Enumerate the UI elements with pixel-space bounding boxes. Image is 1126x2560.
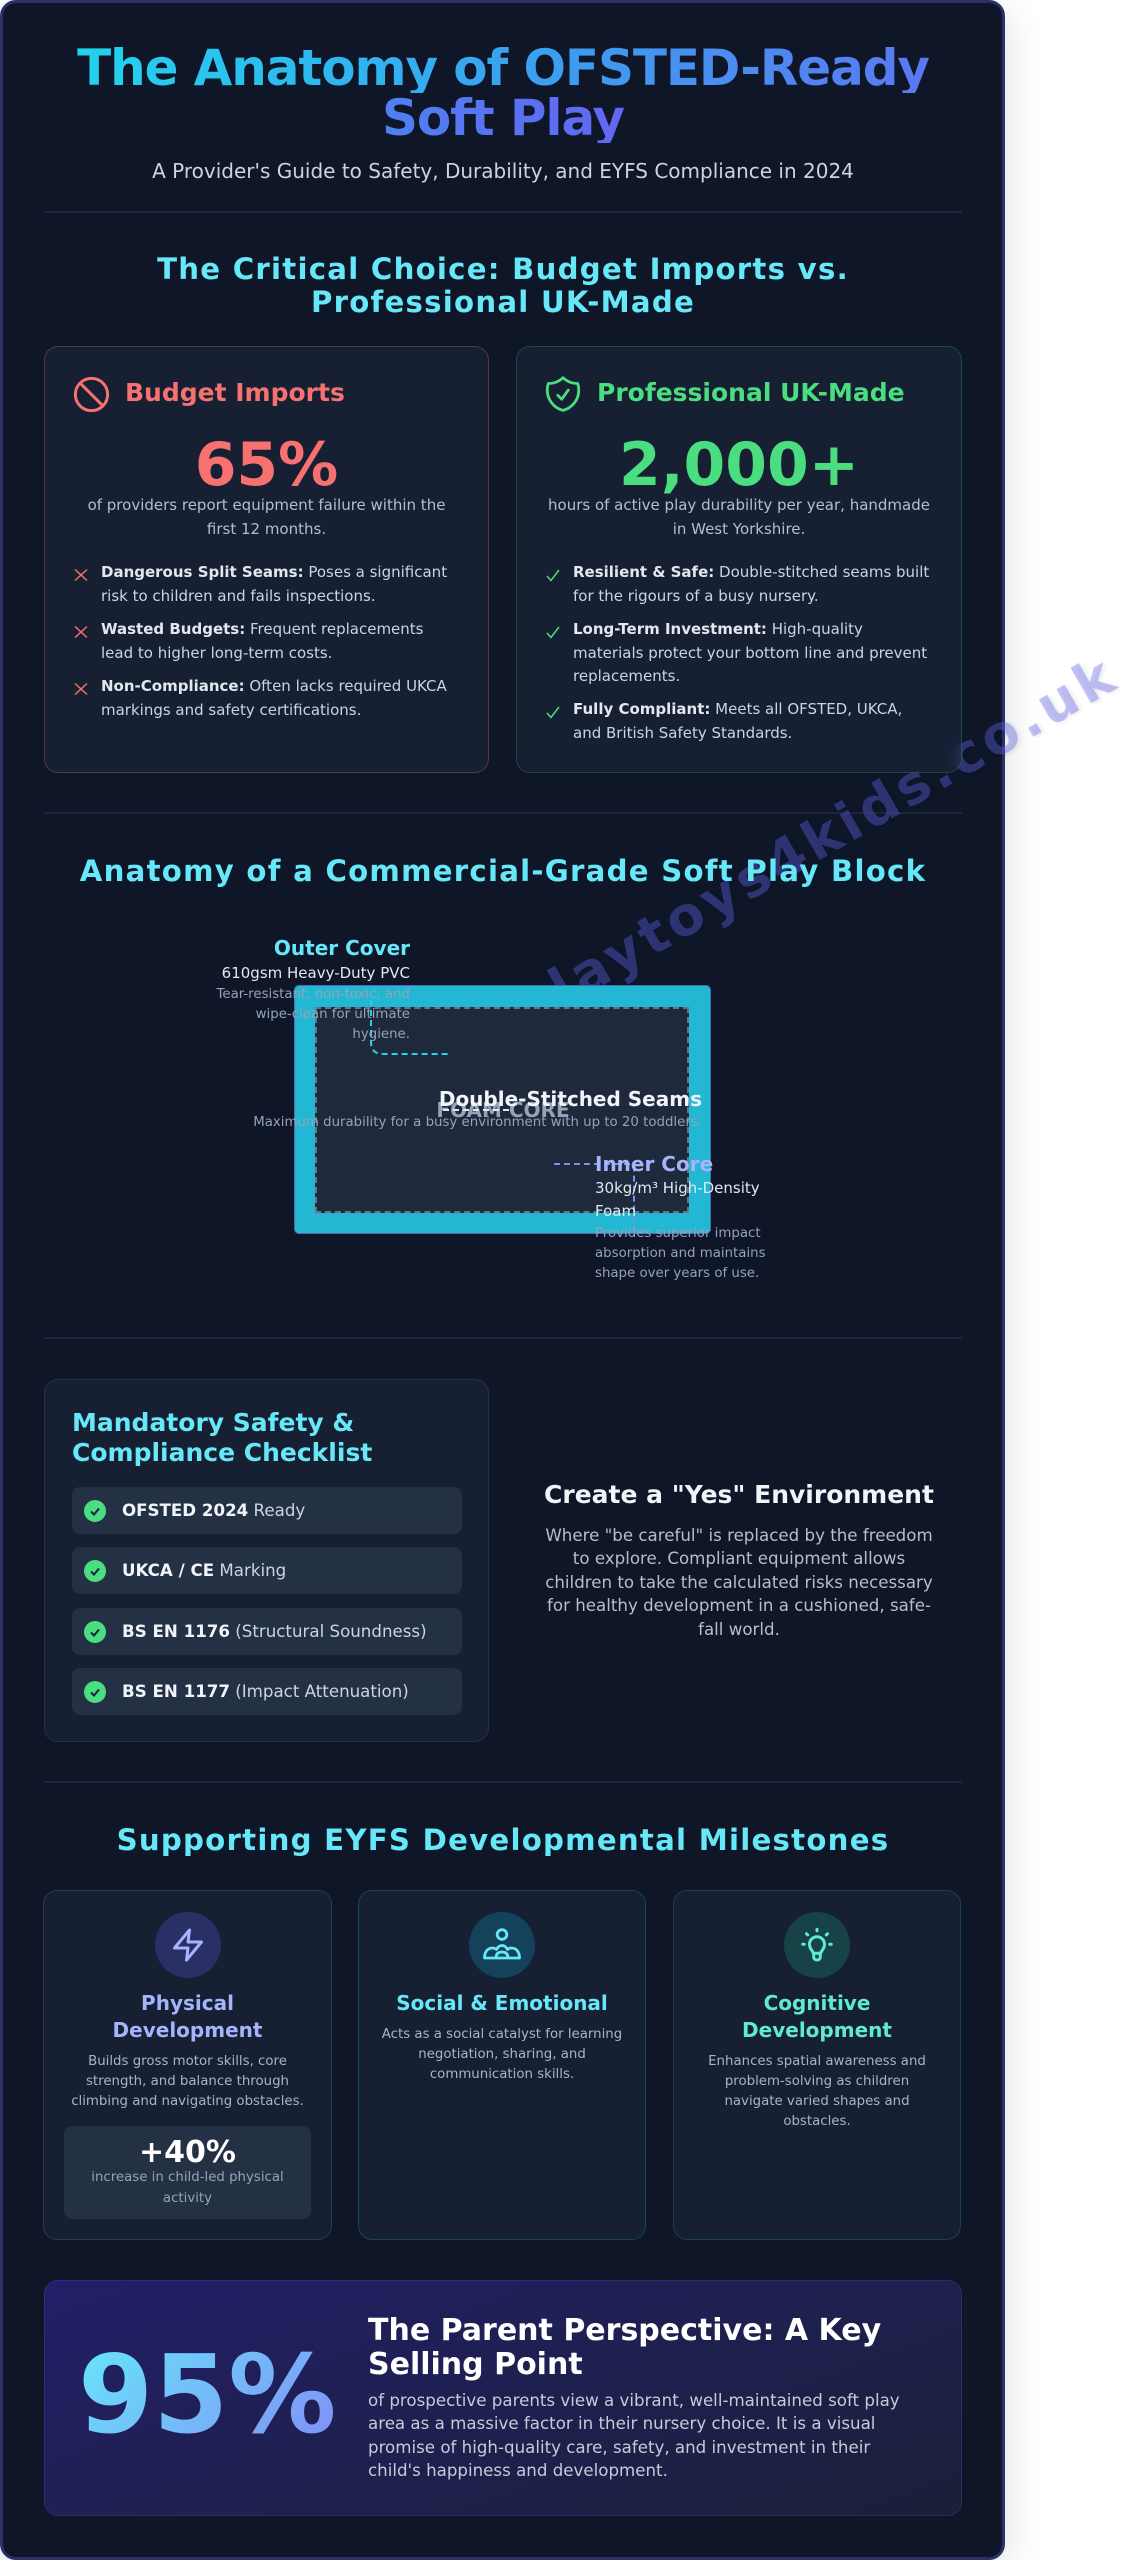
checklist row (72, 1547, 462, 1594)
callout: outer cover: hygiene. (352, 1027, 410, 1042)
panel heading: Selling Point (368, 2347, 583, 2382)
stat caption (548, 496, 930, 538)
card heading: Cognitive (764, 1991, 870, 2015)
list item: Dangerous Split Seams: Poses a significant (101, 563, 447, 581)
checklist row (72, 1487, 462, 1534)
callout: inner core: shape over years of use. (595, 1266, 759, 1281)
callout: inner core: absorption and maintains (595, 1246, 766, 1261)
heading: critical choice (157, 252, 849, 319)
card: cognitive development (673, 1890, 961, 2240)
callout: double-stitched seams (253, 1087, 702, 1130)
card: physical development (43, 1890, 332, 2240)
callout: outer cover: 610gsm Heavy-Duty PVC (222, 964, 410, 982)
inner foam core (315, 1007, 689, 1213)
heading: critical choice: The Critical Choice: Budget Imports vs. (157, 252, 849, 286)
callout: inner core: Foam (595, 1202, 636, 1220)
card heading: Physical (141, 1991, 234, 2015)
heading: critical choice: Professional UK-Made (311, 285, 695, 319)
title: Soft Play (382, 89, 624, 147)
callout: outer cover: Tear-resistant, non-toxic, and (216, 987, 410, 1002)
list item: Fully Compliant: Meets all OFSTED, UKCA, (573, 700, 902, 718)
diagram: soft play block (216, 936, 766, 1281)
list item: Wasted Budgets: Frequent replacements (101, 620, 423, 638)
icon: zap (155, 1912, 221, 1978)
panel text: child's happiness and development. (368, 2461, 668, 2480)
text block: yes environment (544, 1480, 934, 1639)
stat caption: in West Yorkshire. (673, 520, 805, 538)
checklist row: OFSTED 2024 Ready (122, 1501, 305, 1520)
panel: parent perspective (44, 2280, 962, 2516)
list item: lead to higher long-term costs. (101, 644, 332, 662)
stat caption: hours of active play durability per year, handmade (548, 496, 930, 514)
big stat: 65% (195, 430, 338, 500)
card heading (742, 1991, 892, 2042)
stat box: activity (163, 2190, 212, 2206)
big stat: 95% (78, 2333, 337, 2458)
list item: markings and safety certifications. (101, 700, 361, 718)
card text (71, 2054, 304, 2109)
list item (573, 700, 902, 742)
card text (382, 2027, 622, 2082)
callout: double-stitched seams: Maximum durability for a busy environment with up to 20 toddlers. (253, 1115, 702, 1130)
checklist row: BS EN 1176 (Structural Soundness) (122, 1622, 427, 1641)
watermark: playtoys4kids.co.uk (501, 642, 1126, 1041)
panel: compliance checklist (44, 1379, 489, 1742)
callout: inner core: 30kg/m³ High-Density (595, 1179, 760, 1197)
list item: for the rigours of a busy nursery. (573, 586, 819, 604)
panel text: area as a massive factor in their nursery choice. It is a visual (368, 2414, 875, 2433)
foam core label: FOAM CORE (436, 1098, 570, 1122)
list item: Resilient & Safe: Double-stitched seams built (573, 563, 929, 581)
panel heading (368, 2313, 881, 2382)
card heading: Professional UK-Made (597, 378, 905, 407)
subtitle: A Provider's Guide to Safety, Durability, and EYFS Compliance in 2024 (152, 159, 854, 183)
card heading: Social & Emotional (396, 1991, 608, 2015)
heading: milestones: Supporting EYFS Developmental Milestones (117, 1823, 889, 1857)
list item (101, 620, 423, 662)
panel text: of prospective parents view a vibrant, well-maintained soft play (368, 2391, 900, 2410)
card heading (113, 1991, 262, 2042)
card text: navigate varied shapes and (724, 2094, 910, 2109)
panel text (368, 2391, 900, 2480)
stat box: increase in child-led physical (91, 2170, 284, 2185)
panel heading: The Parent Perspective: A Key (368, 2313, 881, 2348)
card heading: Development (742, 2018, 892, 2042)
callout: inner core: Provides superior impact (595, 1226, 761, 1241)
connectors (370, 1000, 635, 1232)
heading: anatomy: Anatomy of a Commercial-Grade Soft Play Block (80, 854, 926, 888)
title (77, 39, 929, 147)
list item: replacements. (573, 667, 680, 685)
card text: communication skills. (430, 2067, 574, 2082)
card: social and emotional (358, 1890, 646, 2240)
checklist heading: Compliance Checklist (72, 1438, 372, 1466)
card text: negotiation, sharing, and (418, 2047, 586, 2062)
list item: risk to children and fails inspections. (101, 586, 376, 604)
card text: Acts as a social catalyst for learning (382, 2027, 622, 2042)
checklist row: BS EN 1177 (Impact Attenuation) (122, 1682, 409, 1701)
card text: Enhances spatial awareness and (708, 2054, 926, 2069)
panel: professional UK-made (516, 346, 962, 773)
callout: inner core: Inner Core (595, 1152, 713, 1176)
list item: and British Safety Standards. (573, 724, 792, 742)
card text: problem-solving as children (725, 2074, 909, 2089)
checklist row: UKCA / CE Marking (122, 1561, 286, 1580)
icon: checks (546, 570, 560, 719)
card text: strength, and balance through (86, 2074, 289, 2089)
list item (101, 677, 447, 718)
stat caption: of providers report equipment failure within the (88, 496, 445, 514)
icon: people (469, 1912, 535, 1978)
icon: prohibited (74, 376, 110, 412)
panel text: promise of high-quality care, safety, and investment in their (368, 2438, 870, 2457)
list item: Long-Term Investment: High-quality (573, 620, 863, 638)
text block: yes environment: for healthy development in a cushioned, safe- (547, 1596, 931, 1615)
list item (573, 620, 927, 685)
callout: inner core (595, 1152, 766, 1281)
callout: double-stitched seams: Double-Stitched Seams (439, 1087, 702, 1111)
text block: yes environment: fall world. (698, 1620, 780, 1639)
text block: yes environment: Where "be careful" is replaced by the freedom (545, 1526, 933, 1545)
callout: outer cover: Outer Cover (274, 936, 410, 960)
icon: lightbulb (784, 1912, 850, 1978)
card heading: Development (113, 2018, 262, 2042)
card text (708, 2054, 926, 2129)
checklist heading: Mandatory Safety & (72, 1408, 354, 1437)
outer cover layer (294, 985, 711, 1234)
stat box (64, 2126, 311, 2219)
list item (573, 563, 929, 604)
text block: yes environment: Create a "Yes" Environment (544, 1480, 934, 1509)
list item: Non-Compliance: Often lacks required UKCA (101, 677, 447, 695)
icon: shield (546, 376, 580, 412)
text block: yes environment: to explore. Compliant equipment allows (573, 1549, 905, 1568)
callout: outer cover (216, 936, 410, 1042)
stat caption (88, 496, 445, 538)
card text: obstacles. (783, 2114, 851, 2129)
checklist heading (72, 1408, 372, 1466)
panel: budget imports (44, 346, 489, 773)
stat box: +40% (139, 2135, 236, 2170)
big stat: 2,000+ (619, 430, 859, 500)
icon: crosses (74, 569, 88, 695)
card text: climbing and navigating obstacles. (71, 2094, 304, 2109)
text block: yes environment: children to take the calculated risks necessary (545, 1573, 933, 1592)
list item (101, 563, 447, 604)
card heading: Budget Imports (125, 378, 345, 407)
card text: Builds gross motor skills, core (88, 2054, 287, 2069)
checklist row (72, 1608, 462, 1655)
list item: materials protect your bottom line and prevent (573, 644, 927, 662)
stat caption: first 12 months. (207, 520, 326, 538)
checklist row (72, 1668, 462, 1715)
title: The Anatomy of OFSTED-Ready (77, 39, 929, 97)
callout: outer cover: wipe-clean for ultimate (256, 1007, 410, 1022)
